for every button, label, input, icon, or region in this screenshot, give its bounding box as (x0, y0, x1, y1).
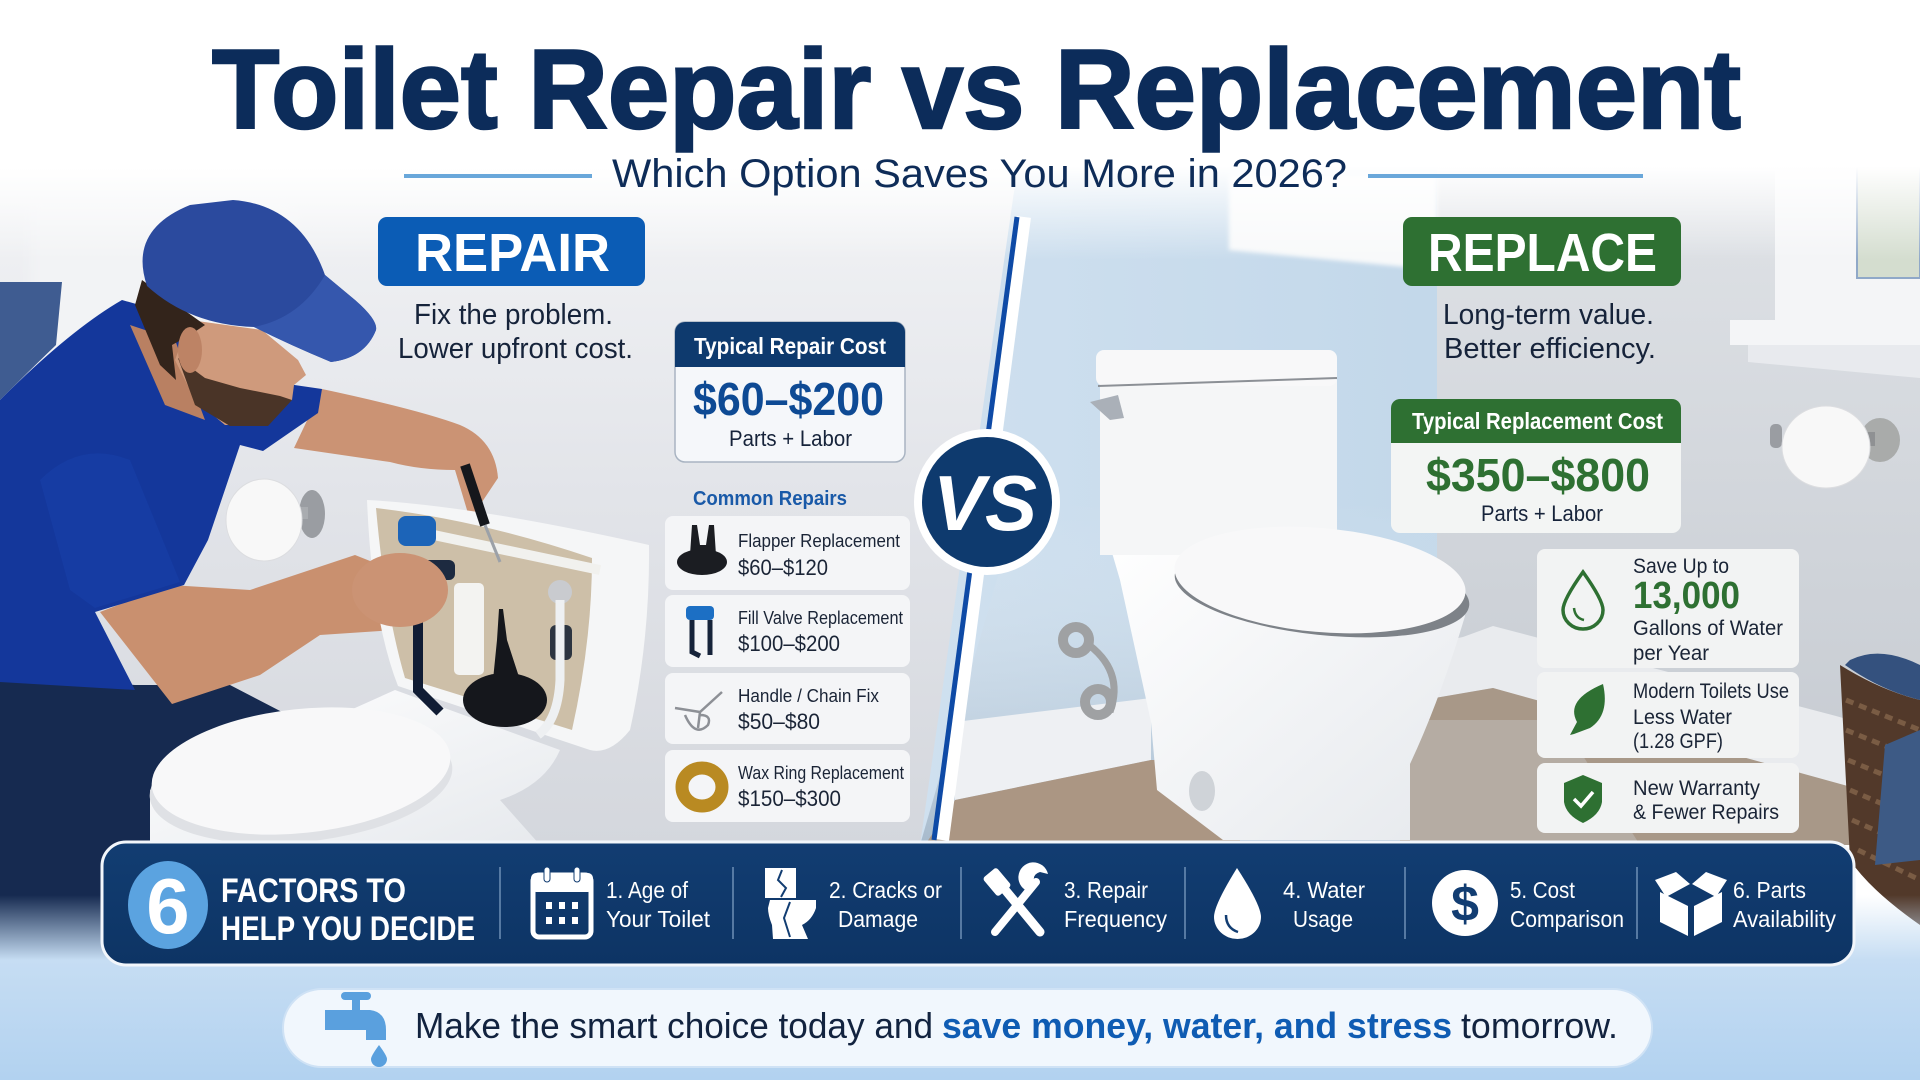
repair row: handle / chain: $50–$80 (738, 709, 820, 734)
repair row: handle / chain (665, 673, 910, 744)
banner text: Make the smart choice today and (415, 1005, 933, 1046)
wall shelf pipe, left (30, 200, 300, 360)
repair row: wax ring: Wax Ring Replacement (738, 763, 904, 783)
bowl (150, 690, 560, 845)
factor 1: age (531, 867, 711, 937)
benefit: water savings: Save Up to (1633, 555, 1729, 578)
cross bar (410, 530, 600, 570)
repair row: fill valve (665, 595, 910, 667)
repair row: flapper: $60–$120 (738, 555, 828, 580)
tank interior (376, 508, 592, 730)
separators (500, 867, 1637, 939)
repair toilet with open tank (144, 465, 649, 858)
factor 4: water usage: 4. Water (1283, 877, 1365, 903)
replace badge: REPLACE (1428, 223, 1657, 283)
seat (1170, 515, 1474, 650)
neck (130, 325, 205, 420)
benefit: less water: Less Water (1633, 706, 1732, 729)
factor 6: parts availability (1655, 872, 1836, 936)
factor 5: cost comparison: 5. Cost (1510, 877, 1576, 903)
number six badge (128, 861, 208, 950)
VS badge: VS (933, 459, 1037, 547)
repair row: fill valve: $100–$200 (738, 631, 840, 656)
toilet paper, right (1770, 406, 1900, 488)
factor 3: repair frequency: 3. Repair (1064, 877, 1148, 903)
tank shell (367, 500, 649, 751)
benefit: warranty (1537, 763, 1799, 833)
white overflow tube (454, 583, 484, 675)
factors heading (221, 872, 475, 948)
repair badge (378, 217, 645, 286)
replace cost card (1391, 399, 1681, 533)
factor 2: cracks: Damage (838, 906, 918, 932)
towel, right wall (1229, 175, 1437, 270)
benefit: water savings: per Year (1633, 642, 1709, 665)
beard (178, 358, 292, 426)
factor 4: water usage: Usage (1293, 906, 1353, 932)
replace tagline: Better efficiency. (1444, 333, 1656, 365)
factor 6: parts availability: 6. Parts (1733, 877, 1806, 903)
top fade into header (0, 90, 1920, 260)
panel: repair (378, 217, 910, 822)
factor 2: cracks (765, 868, 942, 939)
repair row: flapper (665, 516, 910, 590)
benefit: warranty: & Fewer Repairs (1633, 801, 1779, 824)
factor 3: repair frequency (982, 862, 1167, 932)
towel bar, left (0, 282, 110, 400)
shirt (0, 300, 322, 690)
closing banner (283, 989, 1652, 1067)
factor 4: water usage (1214, 868, 1365, 939)
benefit: water savings: Gallons of Water (1633, 617, 1783, 640)
toilet paper, left (226, 479, 325, 561)
repair row: wax ring: $150–$300 (738, 786, 841, 811)
drain opening (1189, 771, 1215, 811)
factor 1: age: 1. Age of (606, 877, 689, 903)
right valve and hose (538, 580, 572, 735)
tank lid (1096, 350, 1337, 386)
replace cost card: Parts + Labor (1481, 501, 1603, 526)
factor 5: cost comparison: Comparison (1510, 906, 1624, 932)
benefit: water savings: 13,000 (1633, 575, 1740, 617)
icon: faucet (325, 992, 387, 1067)
repair row: handle / chain: Handle / Chain Fix (738, 686, 879, 706)
flush handle (1090, 395, 1124, 420)
repair cost card: $60–$200 (693, 373, 884, 425)
ear (178, 327, 202, 373)
number six badge: 6 (146, 862, 190, 950)
factors bar (102, 842, 1854, 965)
face (175, 320, 306, 425)
VS divider line (934, 217, 1024, 840)
repair row: wax ring (665, 750, 910, 822)
replace tagline (1443, 299, 1656, 365)
cap (143, 200, 376, 362)
banner text: save money, water, and stress (942, 1005, 1452, 1046)
towel ring (1063, 627, 1114, 715)
toilet seat (144, 694, 458, 858)
subtitle with rules (404, 152, 1643, 196)
replacement toilet (1063, 350, 1474, 840)
repair row: fill valve: Fill Valve Replacement (738, 608, 903, 628)
screwdriver (465, 465, 500, 562)
fist on valve (352, 553, 448, 627)
title: Toilet Repair vs Replacement (212, 27, 1741, 152)
bowl body (1108, 533, 1465, 840)
repair tagline (398, 299, 633, 365)
hair (135, 280, 205, 380)
replace cost card: $350–$800 (1426, 449, 1650, 501)
plumber (0, 200, 498, 970)
benefit: less water (1537, 672, 1799, 758)
banner text: tomorrow. (1461, 1005, 1618, 1046)
benefit: less water: Modern Toilets Use (1633, 680, 1789, 703)
factor 6: parts availability: Availability (1733, 906, 1836, 932)
repair cost card: Parts + Labor (729, 426, 852, 451)
repair tagline: Lower upfront cost. (398, 333, 633, 365)
repair row: flapper: Flapper Replacement (738, 531, 900, 551)
forearm holding fill valve (100, 555, 430, 704)
benefit: water savings (1537, 549, 1799, 668)
benefit: less water: (1.28 GPF) (1633, 730, 1723, 753)
laundry basket (1840, 654, 1920, 925)
replace cost card: Typical Replacement Cost (1412, 408, 1663, 434)
factor 3: repair frequency: Frequency (1064, 906, 1167, 932)
VS badge (914, 429, 1060, 575)
raised arm (294, 389, 498, 520)
benefit: warranty: New Warranty (1633, 777, 1760, 800)
repair cost card: Typical Repair Cost (694, 333, 886, 359)
repair cost card (675, 322, 905, 462)
factor 5: cost comparison: $ (1451, 876, 1479, 932)
banner text (415, 1005, 1618, 1046)
bottom fade (0, 895, 1920, 1080)
factor 5: cost comparison (1432, 870, 1624, 936)
common repairs heading: Common Repairs (693, 488, 847, 510)
pants (0, 675, 282, 970)
factors heading: FACTORS TO (221, 872, 406, 910)
factor 2: cracks: 2. Cracks or (829, 877, 942, 903)
factors heading: HELP YOU DECIDE (221, 910, 475, 948)
fill valve (398, 516, 455, 712)
repair badge: REPAIR (415, 223, 610, 283)
subtitle with rules: Which Option Saves You More in 2026? (612, 152, 1347, 196)
window (1730, 165, 1920, 378)
tank (1100, 380, 1337, 555)
replace tagline: Long-term value. (1443, 299, 1654, 331)
flapper (463, 609, 547, 727)
repair tagline: Fix the problem. (414, 299, 613, 331)
factor 1: age: Your Toilet (606, 906, 711, 932)
panel: replace (1391, 217, 1799, 833)
